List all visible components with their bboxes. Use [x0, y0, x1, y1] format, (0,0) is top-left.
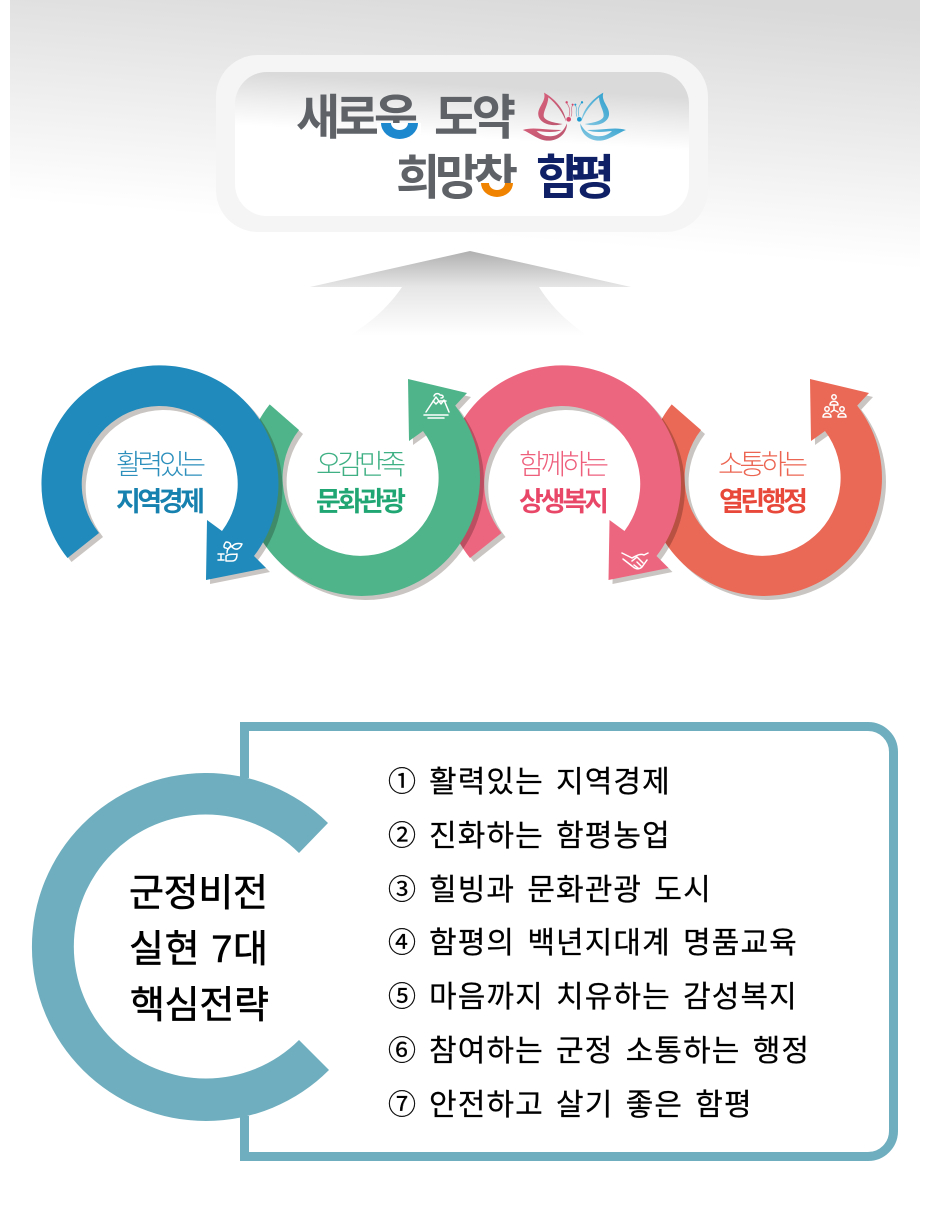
- item 2: ②: [388, 820, 416, 851]
- title slogan: 도약: [434, 92, 516, 145]
- label: 소통하는 열린행정: [718, 449, 808, 517]
- item 5: 마음까지 치유하는 감성복지: [429, 981, 798, 1014]
- strategy list: [388, 766, 810, 1122]
- label: 함께하는 상생복지: 함께하는: [519, 449, 609, 480]
- icon: sprout in hand: [218, 542, 242, 561]
- item 3: ③: [388, 874, 416, 905]
- label: 소통하는 열린행정: 소통하는: [718, 449, 808, 480]
- label: 활력있는 지역경제: [116, 449, 206, 517]
- title slogan: [296, 92, 615, 205]
- item 5: ⑤: [388, 981, 416, 1012]
- item 7: 안전하고 살기 좋은 함평: [429, 1089, 753, 1122]
- label: 함께하는 상생복지: 상생복지: [519, 487, 609, 517]
- title slogan: 희망찬: [396, 152, 518, 205]
- label: 함께하는 상생복지: [519, 449, 609, 517]
- C-shaped ring: [32, 773, 329, 1121]
- icon: people network: [823, 395, 846, 417]
- circular arrow: 소통하는 열린행정: [646, 379, 886, 600]
- icon: mountain and cloud: [424, 394, 449, 418]
- heading: 군정비전 실현 7대 핵심전략: 핵심전략: [130, 985, 269, 1027]
- heading: 군정비전 실현 7대 핵심전략: 군정비전: [129, 873, 268, 915]
- item 7: ⑦: [388, 1089, 416, 1120]
- item 2: 진화하는 함평농업: [429, 820, 671, 853]
- title slogan: 함평: [536, 152, 615, 205]
- icon: butterfly logo: [523, 93, 626, 141]
- circular arrow: 오감만족 문화관광: [244, 379, 484, 600]
- heading: 군정비전 실현 7대 핵심전략: 실현 7대: [129, 929, 268, 971]
- item 1: ①: [388, 766, 416, 797]
- label: 오감만족 문화관광: [316, 449, 406, 517]
- item 1: 활력있는 지역경제: [429, 766, 671, 799]
- speech bubble frame: [216, 55, 708, 232]
- label: 오감만족 문화관광: 오감만족: [316, 449, 406, 480]
- label: 소통하는 열린행정: 열린행정: [719, 487, 808, 517]
- background gradient band: [10, 0, 920, 280]
- panel: rounded border frame: [244, 726, 894, 1156]
- item 4: 함평의 백년지대계 명품교육: [429, 927, 798, 960]
- label: 활력있는 지역경제: 지역경제: [116, 487, 205, 517]
- heading: 군정비전 실현 7대 핵심전략: [129, 873, 269, 1027]
- title slogan: 새로운: [296, 92, 418, 145]
- upward arrow pedestal: [310, 251, 631, 336]
- circular arrow: 활력있는 지역경제: [41, 365, 282, 584]
- item 6: ⑥: [388, 1035, 416, 1066]
- circular arrow: 함께하는 상생복지: [444, 365, 685, 584]
- item 4: ④: [388, 927, 416, 958]
- item 3: 힐빙과 문화관광 도시: [429, 874, 712, 907]
- item 6: 참여하는 군정 소통하는 행정: [429, 1035, 810, 1068]
- label: 활력있는 지역경제: 활력있는: [116, 449, 206, 480]
- label: 오감만족 문화관광: 문화관광: [316, 487, 406, 517]
- icon: handshake: [622, 553, 648, 569]
